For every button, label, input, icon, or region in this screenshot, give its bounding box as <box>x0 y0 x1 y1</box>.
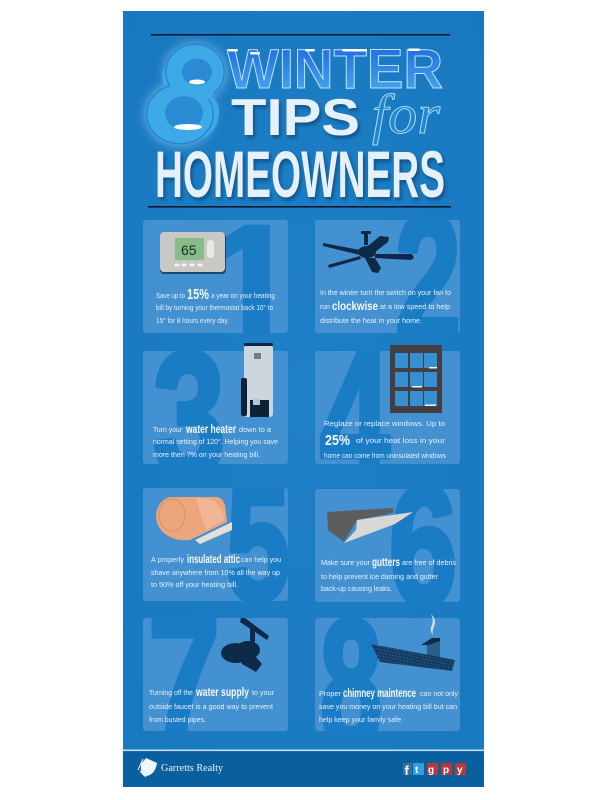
text block: 15° for 8 hours every day. <box>156 316 229 325</box>
TIPS: TIPS <box>231 89 360 147</box>
text block: gutters <box>372 555 400 569</box>
text block: Make sure your <box>321 558 370 567</box>
icon: gutter <box>327 508 413 543</box>
panel: tip 5 <box>143 488 288 601</box>
icon: thermostat <box>160 232 226 274</box>
text block: Turn your <box>153 425 182 434</box>
numeral 5: 5 <box>226 451 290 635</box>
panel: tip 2 <box>315 220 460 333</box>
social icons: f <box>404 763 410 778</box>
footer <box>123 750 484 787</box>
text block: a year on your heating <box>211 291 275 300</box>
text block: shave anywhere from 10% all the way up <box>151 568 280 577</box>
social icons: t <box>415 765 419 776</box>
icon: water faucet <box>221 618 269 672</box>
panel: tip 8 <box>315 614 460 731</box>
snow caps <box>228 48 420 54</box>
text block <box>320 288 451 325</box>
text block: more then 7% on your heating bill. <box>153 450 260 459</box>
panel: tip 7 <box>143 618 288 731</box>
text block: Proper <box>319 689 341 698</box>
social icons: y <box>457 765 463 776</box>
text block: help keep your family safe. <box>319 715 403 724</box>
text block: are free of debris <box>402 558 456 567</box>
text block: In the winter turn the switch on your fan to <box>320 288 451 297</box>
social icons: g <box>428 765 434 776</box>
text block: outside faucet is a good way to prevent <box>149 702 274 711</box>
text block: 15% <box>187 286 209 303</box>
text block: distribute the heat in your home. <box>320 316 422 325</box>
icon: window <box>390 345 442 413</box>
TIPS shadow: TIPS <box>233 92 362 150</box>
icon: thermostat: 65 <box>181 242 197 258</box>
panel: tip 1 <box>143 220 288 333</box>
text block <box>156 286 275 325</box>
text block: water supply <box>195 685 249 699</box>
text block: A properly <box>151 555 184 564</box>
text block: of your heat loss in your <box>356 436 446 445</box>
company name: Garretts Realty <box>161 763 223 774</box>
text block <box>153 422 278 459</box>
text block: Turning off the <box>149 688 193 697</box>
panel: tip 6 <box>315 489 460 602</box>
text block: Save up to <box>156 291 185 300</box>
social icons: p <box>443 765 449 776</box>
text block: back-up causing leaks. <box>321 584 392 593</box>
title <box>143 24 447 214</box>
text block <box>149 685 274 724</box>
text block: from busted pipes. <box>149 715 206 724</box>
numeral 6: 6 <box>389 451 457 641</box>
numeral 8: 8 <box>143 24 236 169</box>
header rule top <box>151 34 450 36</box>
numeral 4: 4 <box>320 312 390 524</box>
text block: chimney maintence <box>343 686 416 700</box>
text block: to help prevent ice daming and gutter <box>321 572 438 581</box>
text block: home can come from uninsulated windows <box>324 451 446 460</box>
icon: water heater <box>241 343 273 417</box>
numeral 8: 8 <box>320 583 382 784</box>
text block: save you money on your heating bill but can <box>319 702 457 711</box>
text block: down to a <box>239 425 272 434</box>
text block: Reglaze or replace windows. Up to <box>324 419 445 428</box>
numeral 1: 1 <box>199 185 305 397</box>
text block <box>151 552 281 589</box>
panel: tip 4 <box>315 345 460 464</box>
social icons <box>403 763 466 778</box>
numeral 2: 2 <box>395 178 461 379</box>
text block: can help you <box>241 555 281 564</box>
text block: water heater <box>185 422 236 436</box>
text block: run <box>320 302 330 311</box>
icon: logo leaf <box>138 758 157 777</box>
text block <box>319 686 458 724</box>
for: for <box>372 84 440 146</box>
icon: ceiling fan <box>323 231 414 273</box>
header rule bottom <box>148 206 451 208</box>
text block: can not only <box>420 689 458 698</box>
text block <box>321 555 456 593</box>
text block: clockwise <box>332 299 378 313</box>
text block <box>324 419 446 460</box>
text block: at a low speed to help <box>380 302 450 311</box>
text block: normal setting of 120°. Helping you save <box>153 437 278 446</box>
WINTER: WINTER <box>227 37 443 100</box>
numeral 3: 3 <box>153 315 225 514</box>
panel: tip 3 <box>143 343 288 464</box>
icon: roof and chimney <box>371 614 455 671</box>
icon: insulation roll <box>156 497 232 544</box>
background panel <box>123 11 484 787</box>
text block: insulated attic <box>187 552 240 566</box>
numeral 7: 7 <box>148 574 220 786</box>
text block: to your <box>252 688 274 697</box>
text block: bill by turning your thermostat back 10° to <box>156 303 273 312</box>
text block: to 50% off your heating bill. <box>151 580 238 589</box>
text block: 25% <box>325 432 350 449</box>
